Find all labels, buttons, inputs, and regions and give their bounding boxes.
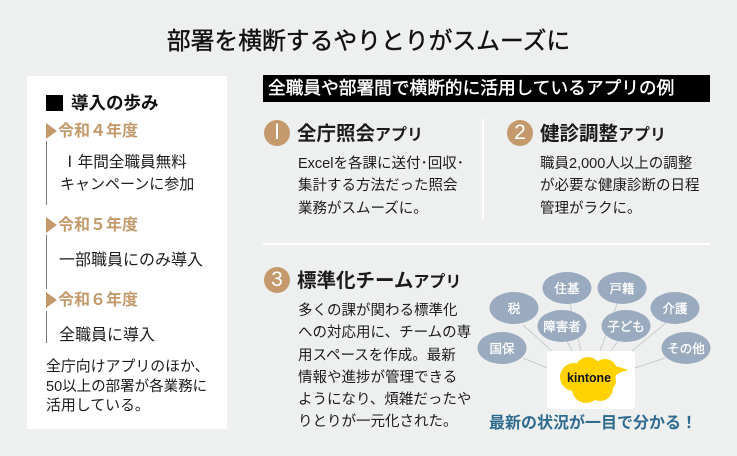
timeline: Reiwa 5: 令和５年度 (58, 217, 138, 234)
kintone card: kintone (567, 370, 611, 385)
number badge 2 (507, 120, 533, 146)
section heading bar (263, 75, 710, 102)
timeline: Reiwa 6: 令和６年度 (58, 292, 138, 309)
department labels: 介護 (662, 301, 688, 316)
number badge 3 (264, 267, 290, 293)
department labels: 子ども (607, 320, 645, 334)
app 1 heading: 全庁照会アプリ (297, 123, 423, 145)
department labels: 住基 (554, 282, 580, 296)
timeline note (46, 358, 210, 414)
department labels: 国保 (489, 342, 515, 356)
department labels: 障害者 (543, 319, 581, 334)
app 3 (264, 267, 471, 430)
app 2 (507, 120, 700, 217)
timeline: Reiwa 4: 令和４年度 (58, 123, 138, 140)
number badge 2: 2 (514, 121, 526, 144)
kintone hub diagram (478, 272, 710, 409)
kintone card (547, 351, 635, 409)
timeline: Reiwa 4: Ⅰ年間全職員無料 (62, 154, 187, 171)
department labels (489, 281, 705, 356)
timeline note: 活用している。 (46, 398, 150, 414)
timeline: Reiwa 5: 一部職員にのみ導入 (59, 252, 203, 269)
panel: adoption timeline (27, 76, 227, 429)
department labels: その他 (667, 342, 705, 356)
app 2 heading: 健診調整アプリ (540, 123, 666, 145)
number badge 3: 3 (271, 268, 283, 291)
app 2 description: 職員2,000人以上の調整 が必要な健康診断の日程 管理がラクに。 (540, 156, 700, 217)
timeline: Reiwa 6 (46, 291, 155, 344)
department labels: 税 (508, 302, 521, 316)
connector lines (523, 304, 666, 368)
app 3 description: 多くの課が関わる標準化 への対応用に、チームの専 用スペースを作成。最新 情報や進捗が管理できる ようになり、煩雑だったや りとりが一元化された。 (298, 303, 471, 430)
timeline: Reiwa 4 (46, 122, 194, 205)
timeline: Reiwa 6: 全職員に導入 (59, 327, 155, 344)
department labels: 戸籍 (609, 281, 635, 296)
app 3 heading: 標準化チームアプリ (297, 270, 461, 292)
timeline note: 50以上の部署が各業務に (46, 379, 207, 395)
diagram caption: 最新の状況が一目で分かる！ (489, 415, 697, 432)
timeline: Reiwa 5 (46, 216, 203, 289)
department bubbles (478, 272, 710, 364)
timeline heading: 導入の歩み (71, 93, 158, 113)
timeline note: 全庁向けアプリのほか、 (46, 359, 210, 375)
app 1 (264, 120, 464, 217)
section heading bar: 全職員や部署間で横断的に活用しているアプリの例 (268, 78, 674, 98)
app 1 description: Excelを各課に送付･回収･ 集計する方法だった照会 業務がスムーズに。 (298, 156, 464, 217)
timeline: Reiwa 4: キャンペーンに参加 (60, 176, 194, 193)
title: 部署を横断するやりとりがスムーズに (167, 28, 570, 55)
number badge 1: Ⅰ (266, 121, 288, 144)
